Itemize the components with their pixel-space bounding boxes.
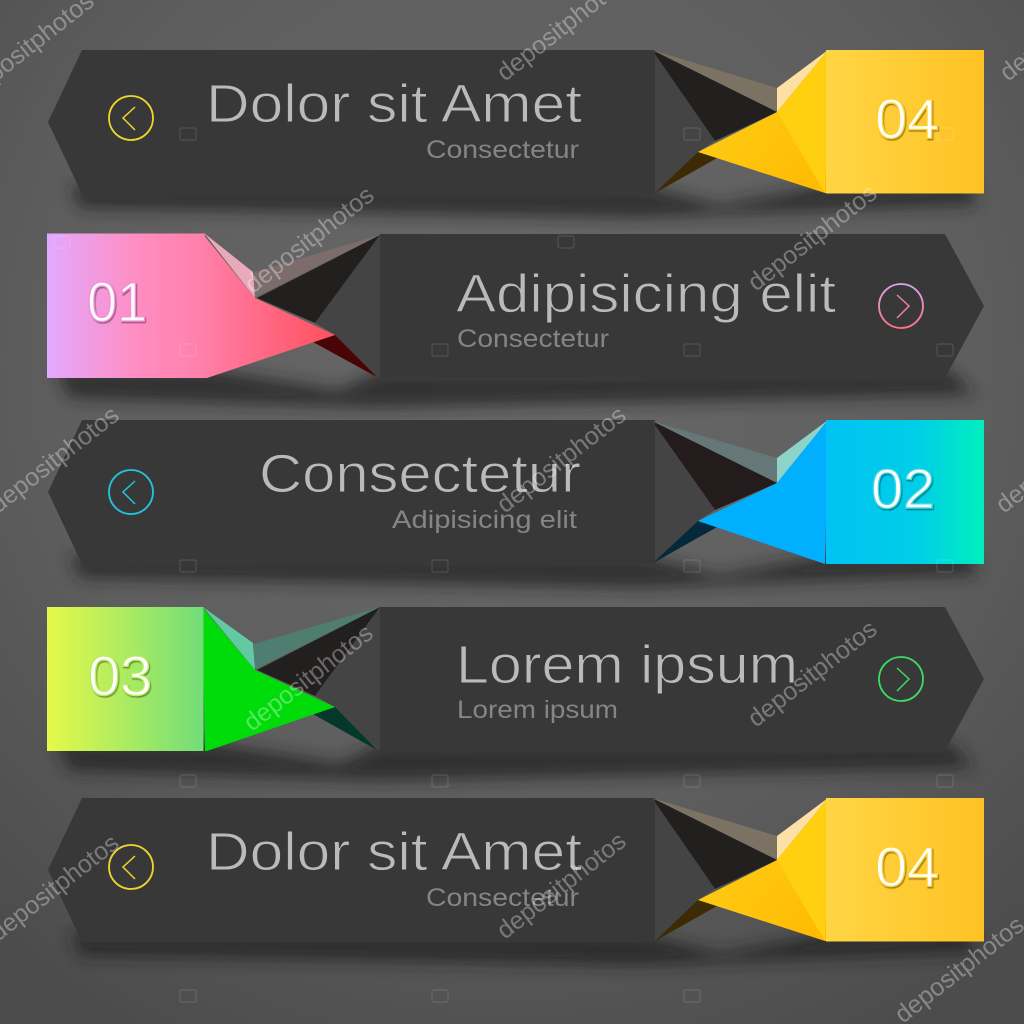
watermarks: depositphotos: [239, 181, 379, 299]
watermarks: depositphotos: [491, 401, 631, 519]
banner 1: Dolor sit Amet 04: [48, 50, 984, 218]
icon: right chevron circle: [879, 284, 923, 328]
banner 5: Dolor sit Amet 04: [48, 798, 984, 966]
number 04: 04: [875, 87, 939, 150]
title: Dolor sit Amet: [206, 822, 582, 882]
watermarks: depositphotos: [238, 619, 378, 737]
title: Dolor sit Amet: [206, 74, 582, 134]
watermarks: depositphotos: [491, 827, 631, 945]
number 02: 02: [871, 457, 935, 520]
subtitle: Adipisicing elit: [392, 506, 577, 534]
subtitle: Consectetur: [426, 884, 579, 912]
watermarks: depositphotos: [742, 615, 882, 733]
subtitle: Consectetur: [426, 136, 579, 164]
number 04: 04: [875, 835, 939, 898]
number 01: 01: [87, 270, 147, 333]
banner 2: Adipisicing elit 01: [47, 233, 984, 408]
icon: left chevron circle: [109, 470, 153, 514]
watermarks: depositphotos: [742, 179, 882, 297]
subtitle: Consectetur: [457, 325, 609, 353]
title: Consectetur: [259, 444, 581, 504]
banner 4: Lorem ipsum 03: [47, 607, 984, 781]
icon: right chevron circle: [879, 657, 923, 701]
subtitle: Lorem ipsum: [457, 696, 618, 724]
title: Adipisicing elit: [456, 264, 836, 324]
title: Lorem ipsum: [456, 635, 798, 695]
watermark camera icons: [54, 128, 953, 1002]
number 03: 03: [88, 644, 152, 707]
icon: left chevron circle: [109, 845, 153, 889]
icon: left chevron circle: [109, 96, 153, 140]
banner 3: Consectetur 02: [48, 420, 984, 588]
